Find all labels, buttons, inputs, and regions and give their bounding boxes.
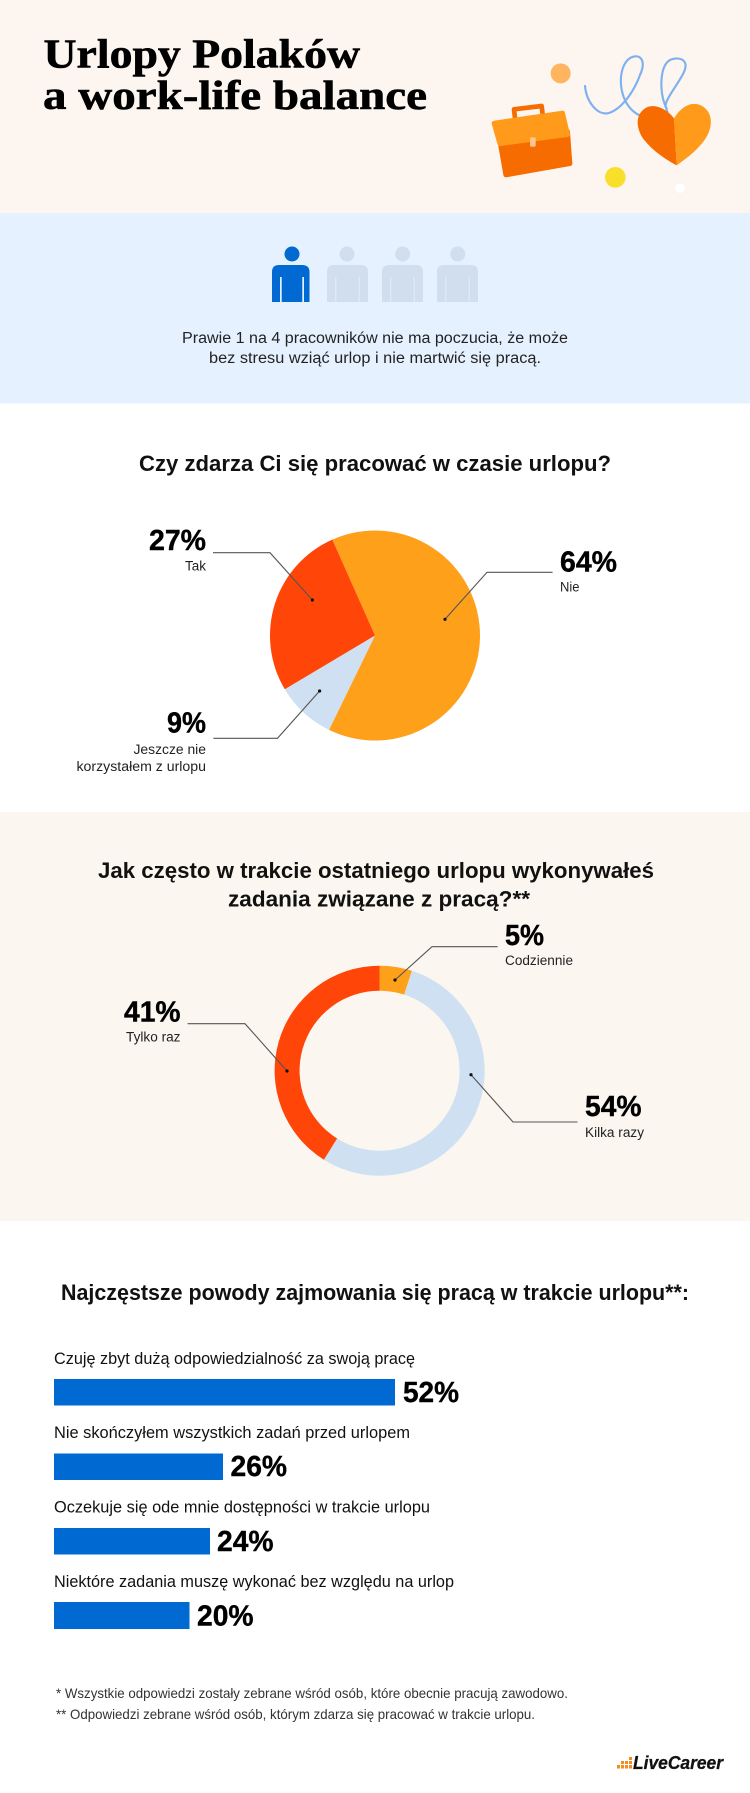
leader line: 9%	[213, 689, 321, 738]
label: 41% Tylko raz: Tylko raz	[126, 1030, 181, 1045]
label: 27% Tak: Tak	[185, 559, 206, 574]
bar row: 24%: Oczekuje się ode mnie dostępności w trakcie urlopu	[54, 1499, 430, 1517]
icon: orange coin	[551, 63, 571, 83]
icon: grey person 2	[327, 246, 368, 302]
panel: donut chart section	[0, 812, 750, 1221]
label: 9% Jeszcze nie korzystałem z urlopu	[76, 708, 206, 774]
heading: donut question: zadania związane z pracą?**	[228, 887, 530, 912]
intro text: bez stresu wziąć urlop i nie martwić się pracą.	[209, 350, 541, 367]
heading: pie question: Czy zdarza Ci się pracować w czasie urlopu?	[139, 451, 611, 476]
label: 64% Nie	[560, 547, 617, 595]
title: a work-life balance	[43, 72, 427, 118]
label: 5% Codziennie: 5%	[505, 920, 544, 952]
bar row: 24%: 24%	[217, 1526, 274, 1558]
label: 64% Nie: Nie	[560, 580, 580, 595]
label: 54% Kilka razy: 54%	[585, 1091, 642, 1123]
panel: intro statistic	[0, 213, 750, 404]
bar row: 26%: Nie skończyłem wszystkich zadań przed urlopem	[54, 1424, 410, 1442]
bar row: 26%	[54, 1424, 410, 1483]
icon: briefcase, heart and coins illustration	[494, 56, 711, 193]
footnotes	[56, 1685, 568, 1722]
heading: reasons: Najczęstsze powody zajmowania się pracą w trakcie urlopu**:	[61, 1280, 689, 1305]
label: 54% Kilka razy: Kilka razy	[585, 1125, 644, 1140]
label: 64% Nie: 64%	[560, 547, 617, 579]
icon: briefcase	[494, 106, 570, 175]
intro text: Prawie 1 na 4 pracowników nie ma poczucia, że może	[182, 330, 568, 347]
title	[43, 30, 427, 118]
bar row: 26%: 26%	[230, 1451, 287, 1483]
title: Urlopy Polaków	[44, 30, 360, 76]
bar row: 20%	[54, 1573, 454, 1633]
label: 9% Jeszcze nie korzystałem z urlopu: Jeszcze nie	[134, 742, 206, 757]
label: 41% Tylko raz: 41%	[124, 997, 181, 1029]
bar row: 52%: Czuję zbyt dużą odpowiedzialność za swoją pracę	[54, 1350, 415, 1368]
bar row: 24%	[54, 1499, 430, 1558]
bar row: 52%: 52%	[403, 1377, 459, 1409]
panel: pie chart section	[76, 451, 617, 774]
leader line: 54%	[469, 1073, 578, 1122]
panel: header	[0, 0, 750, 213]
label: 9% Jeszcze nie korzystałem z urlopu: 9%	[167, 708, 206, 740]
icon: blue squiggle	[585, 56, 686, 117]
heading: donut question	[98, 858, 654, 912]
leader line: 5%	[393, 947, 498, 982]
label: 41% Tylko raz	[124, 997, 181, 1045]
pie chart	[270, 531, 480, 741]
panel: reasons bar chart	[54, 1280, 689, 1633]
bar row: 20%: Niektóre zadania muszę wykonać bez względu na urlop	[54, 1573, 454, 1591]
label: 54% Kilka razy	[585, 1091, 644, 1140]
label: 27% Tak	[149, 525, 206, 574]
icon: grey person 3	[382, 246, 423, 302]
leader line: 64%	[443, 572, 553, 621]
bar row: 52%	[54, 1350, 459, 1409]
label: 5% Codziennie: Codziennie	[505, 953, 573, 968]
donut chart	[275, 966, 485, 1176]
icon: white dot	[675, 184, 685, 193]
leader line: 27%	[213, 553, 314, 602]
label: 9% Jeszcze nie korzystałem z urlopu: korzystałem z urlopu	[76, 759, 206, 774]
label: 5% Codziennie	[505, 920, 573, 968]
intro text	[182, 330, 568, 367]
bar row: 20%: 20%	[197, 1601, 254, 1633]
leader line: 41%	[188, 1024, 289, 1073]
icon: logo dots	[617, 1757, 632, 1768]
logo: LiveCareer: LiveCareer	[633, 1752, 725, 1773]
heading: donut question: Jak często w trakcie ostatniego urlopu wykonywałeś	[98, 858, 654, 883]
footnotes: * Wszystkie odpowiedzi zostały zebrane wśród osób, które obecnie pracują zawodowo.	[56, 1685, 568, 1701]
footnotes: ** Odpowiedzi zebrane wśród osób, którym zdarza się pracować w trakcie urlopu.	[56, 1706, 535, 1722]
icon: yellow coin	[605, 167, 626, 188]
icon: heart	[638, 104, 711, 165]
icon: grey person 4	[437, 246, 478, 302]
label: 27% Tak: 27%	[149, 525, 206, 557]
icon: highlighted person	[272, 246, 310, 302]
